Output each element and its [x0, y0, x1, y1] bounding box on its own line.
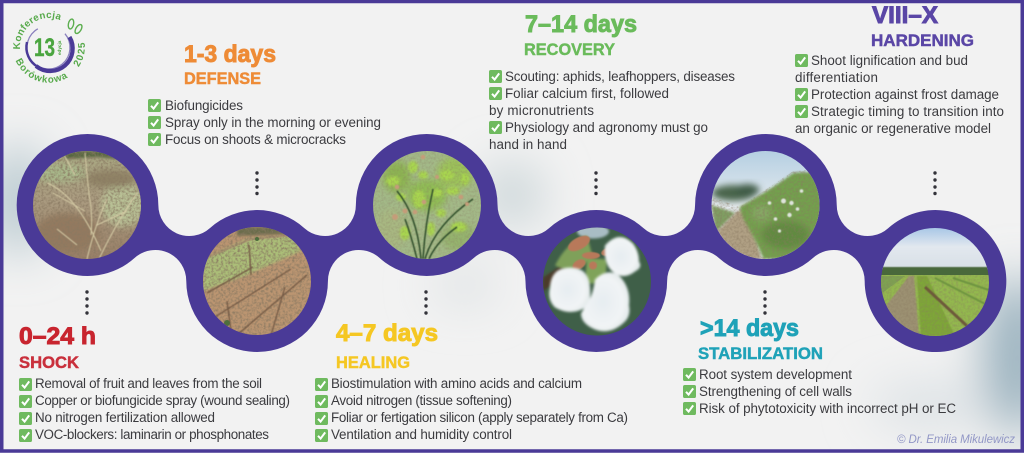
list: defense actions: Spray only in the morning or evening — [165, 115, 381, 130]
list: stabilization actions: Root system development — [699, 367, 852, 382]
list: healing actions: Biostimulation with amino acids and calcium — [331, 376, 582, 391]
list: shock actions: Copper or biofungicide spray (wound sealing) — [35, 393, 290, 408]
list: recovery actions: hand in hand — [489, 137, 567, 152]
list: healing actions: Ventilation and humidity control — [331, 427, 512, 442]
logo: Konferencja Borówkowa 2025: 2025 — [74, 42, 85, 67]
photo: pruned rows on soil — [203, 227, 311, 335]
list: recovery actions: Foliar calcium first, followed — [505, 86, 669, 101]
list: shock actions: Removal of fruit and leaves from the soil — [35, 376, 262, 391]
heading: >14 days: >14 days — [700, 315, 799, 342]
list: shock actions: No nitrogen fertilization allowed — [35, 410, 215, 425]
purple wave timeline band — [17, 134, 1006, 352]
logo: Konferencja Borówkowa 2025: Borówkowa — [16, 58, 68, 83]
list: stabilization actions — [683, 367, 956, 416]
logo: Konferencja Borówkowa 2025: Konferencja — [13, 11, 60, 49]
heading: 1-3 days: 1-3 days — [184, 41, 276, 68]
list: healing actions — [315, 376, 628, 442]
logo: Konferencja Borówkowa 2025: 13 — [34, 34, 55, 62]
heading: VIII–X: VIII–X — [872, 2, 938, 29]
list: stabilization actions: Strengthening of cell walls — [699, 384, 852, 399]
dotted connectors — [85, 171, 937, 315]
list: recovery actions: Physiology and agronomy must go — [505, 120, 708, 135]
photo: white blueberry flowers — [543, 224, 651, 336]
author credit: © Dr. Emilia Mikulewicz — [897, 434, 1015, 446]
heading: 4–7 days: 4–7 days — [336, 320, 438, 347]
list: shock actions — [19, 376, 290, 442]
subheading: SHOCK: SHOCK — [19, 354, 79, 372]
list: defense actions: Focus on shoots & microcracks — [165, 132, 346, 147]
heading: 0–24 h: 0–24 h — [19, 323, 96, 350]
list: hardening actions: Strategic timing to transition into — [811, 104, 1004, 119]
list: hardening actions: Protection against frost damage — [811, 87, 999, 102]
list: healing actions: Foliar or fertigation silicon (apply separately from Ca) — [331, 410, 628, 425]
list: defense actions: Biofungicides — [165, 98, 243, 113]
logo: Konferencja Borówkowa 2025 — [13, 11, 85, 83]
panel: 1-3 days defense — [148, 41, 381, 147]
panel: 0–24 h shock — [19, 323, 290, 442]
list: healing actions: Avoid nitrogen (tissue softening) — [331, 393, 512, 408]
list: defense actions — [148, 98, 381, 147]
list: stabilization actions: Risk of phytotoxicity with incorrect pH or EC — [699, 401, 956, 416]
panel: 4–7 days healing — [315, 320, 628, 442]
logo: Konferencja Borówkowa 2025: edycja — [57, 40, 62, 55]
heading: 7–14 days: 7–14 days — [525, 11, 637, 38]
list: hardening actions: an organic or regenerative model — [795, 121, 991, 136]
soft shadow blobs — [0, 145, 1024, 435]
subheading: RECOVERY: RECOVERY — [524, 41, 615, 59]
list: shock actions: VOC-blockers: laminarin or phosphonates — [35, 427, 269, 442]
photo: green shoots with buds — [373, 151, 481, 259]
subheading: HARDENING: HARDENING — [871, 32, 974, 50]
photo: damaged bushes after frost — [33, 151, 145, 259]
list: hardening actions: differentiation — [795, 70, 878, 85]
subheading: HEALING: HEALING — [336, 354, 410, 372]
panel: VIII–X hardening — [795, 2, 1004, 136]
subheading: STABILIZATION: STABILIZATION — [698, 345, 823, 363]
panel: >14 days stabilization — [683, 315, 956, 416]
list: hardening actions — [795, 53, 1004, 136]
list: hardening actions: Shoot lignification and bud — [811, 53, 968, 68]
subheading: DEFENSE: DEFENSE — [184, 70, 261, 88]
list: recovery actions: by micronutrients — [489, 103, 594, 118]
photo: bushes beside a path — [712, 151, 822, 259]
panel: 7–14 days recovery — [489, 11, 735, 152]
list: recovery actions — [489, 69, 735, 152]
list: recovery actions: Scouting: aphids, leafhoppers, diseases — [505, 69, 735, 84]
photo: blueberry field under sky — [881, 228, 989, 337]
